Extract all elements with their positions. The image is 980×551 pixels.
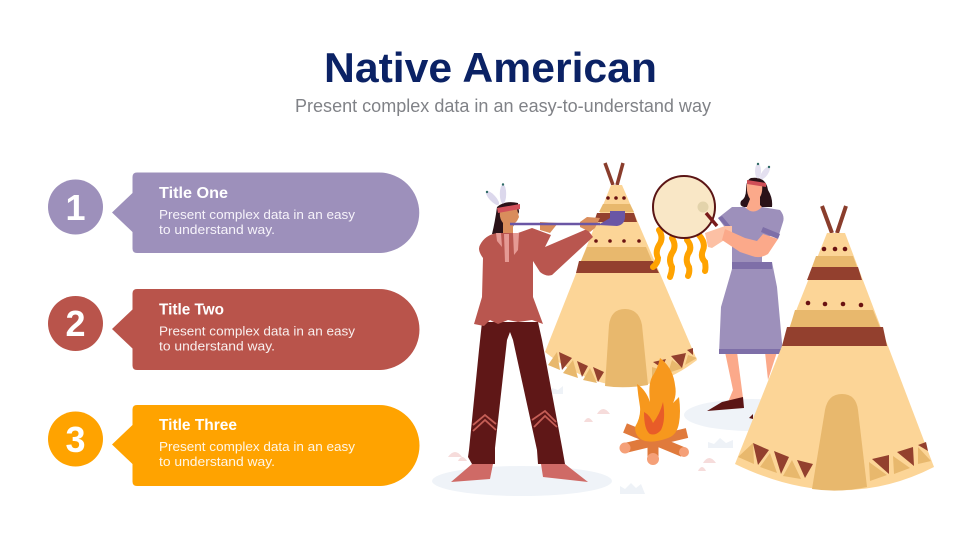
callout 3: to understand way.: [159, 455, 275, 469]
callout 1: Present complex data in an easy: [159, 208, 356, 222]
number badge 1: 1: [65, 187, 86, 228]
number badge 2: 2: [65, 303, 86, 344]
number badge 2: [48, 296, 103, 351]
tipi one (back): [545, 163, 697, 387]
man: hair, head, headband, feathers: [484, 183, 520, 234]
illustration: native american camp scene: [432, 163, 934, 496]
number badge 3: 3: [65, 419, 86, 460]
pipe: [510, 211, 625, 226]
drum stick: [698, 202, 717, 226]
callout 3: Present complex data in an easy: [159, 440, 356, 454]
callout 3: Title Three: [159, 417, 237, 434]
woman: dress: [718, 207, 784, 354]
panel: item one: [48, 172, 419, 253]
woman: hair, face, headband, feathers: [740, 163, 772, 212]
callout 2: Present complex data in an easy: [159, 324, 356, 338]
callout 2: [112, 289, 419, 370]
tipi two (front): [735, 206, 934, 491]
man: feet: [451, 464, 588, 482]
woman: legs and shoes: [707, 352, 777, 419]
number badge 3: [48, 412, 103, 466]
campfire: [620, 358, 689, 465]
callout 1: to understand way.: [159, 223, 275, 237]
man: hands: [540, 217, 600, 233]
callout 2: Title Two: [159, 302, 224, 318]
panel: item two: [48, 289, 419, 370]
callout 2: to understand way.: [159, 340, 275, 354]
callout 3: [112, 405, 420, 486]
drum with tassels: [653, 176, 715, 277]
man: trousers: [468, 322, 565, 464]
callout 1: [112, 172, 419, 253]
woman figure: [698, 163, 784, 419]
title: Native American: [324, 44, 657, 91]
subtitle: Present complex data in an easy-to-understand way: [295, 96, 711, 116]
man figure: [451, 183, 625, 482]
woman: arms and hands: [705, 226, 778, 257]
number badge 1: [48, 180, 103, 234]
callout 1: Title One: [159, 185, 228, 202]
ground shadows and small mounds: [432, 386, 820, 496]
man: shirt: [474, 228, 593, 326]
panel: item three: [48, 405, 420, 486]
